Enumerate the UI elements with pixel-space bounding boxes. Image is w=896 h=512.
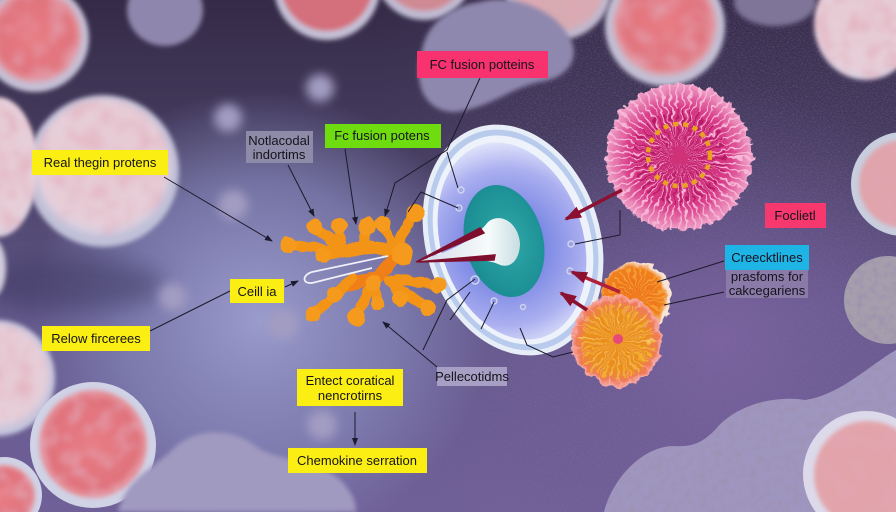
paperclip loop [304, 256, 388, 283]
teal core [452, 176, 556, 306]
cell: top right rose [605, 0, 725, 86]
disc inner [413, 123, 611, 359]
label: FC fusion potteins: FC fusion potteins [430, 57, 535, 72]
cell: bottom right pink [803, 411, 896, 512]
label: Entect coratical nencrotirns: nencrotirns [318, 388, 383, 403]
molecule: orange protein [280, 204, 446, 326]
label: prasfoms for cakcegariens: cakcegariens [729, 283, 806, 298]
membrane disc [394, 101, 632, 379]
cell: lower left rose [30, 382, 156, 508]
cell: right textured grey [844, 256, 896, 344]
leader lines [150, 78, 724, 445]
small blurred spheres [159, 74, 337, 440]
label: Pellecotidms: Pellecotidms [435, 369, 509, 384]
cell: top pale [504, 0, 612, 40]
label: Ceill ia [230, 279, 284, 303]
lilac blob: bottom [118, 432, 356, 512]
label: prasfoms for cakcegariens [726, 269, 808, 298]
cell: orange back [602, 262, 672, 332]
label: Creecktlines: Creecktlines [731, 250, 803, 265]
label: Ceill ia: Ceill ia [237, 284, 277, 299]
label: Entect coratical nencrotirns: Entect coratical [306, 373, 395, 388]
label: Chemokine serration: Chemokine serration [297, 453, 417, 468]
label: Notlacodal indortims: indortims [253, 147, 306, 162]
cell: top pink 2 [374, 0, 474, 20]
textured blobs: bottom right [604, 350, 896, 512]
label: FC fusion potteins [417, 51, 548, 78]
cell: orange front [572, 296, 662, 386]
label: Chemokine serration [288, 448, 427, 473]
label: Relow fircerees [42, 326, 150, 351]
label: Relow fircerees: Relow fircerees [51, 331, 141, 346]
cell: top pink 1 [274, 0, 380, 40]
cell: corner pale [814, 0, 896, 80]
label: Fc fusion potens: Fc fusion potens [334, 128, 430, 143]
label: Foclietl: Foclietl [774, 208, 816, 223]
dark red struts [416, 228, 495, 262]
yellow stamens ring [648, 124, 710, 186]
cell: spiky pink [606, 84, 752, 230]
label: Notlacodal indortims: Notlacodal [248, 133, 310, 148]
label: Foclietl [765, 203, 826, 228]
label: Creecktlines [725, 245, 809, 270]
cell: lower left pale [0, 320, 55, 436]
cell: top left pink [0, 0, 89, 92]
cell: right pink [851, 132, 896, 236]
cell: bottom left corner [0, 457, 42, 512]
label: Real thegin protens [32, 150, 168, 175]
cell: large pale left [27, 95, 179, 247]
red arrows [561, 190, 622, 310]
cell: left edge sliver [0, 240, 6, 296]
lilac blob: top right [734, 0, 816, 26]
label: Fc fusion potens [325, 124, 441, 148]
small receptor markers [456, 187, 574, 310]
white funnel [416, 218, 520, 266]
cell: left edge pale [0, 97, 38, 237]
label: prasfoms for cakcegariens: prasfoms for [731, 269, 804, 284]
label: Entect coratical nencrotirns [297, 369, 403, 406]
club ends [280, 204, 446, 326]
lilac blob: top centre [419, 0, 574, 112]
lilac blob: top [127, 0, 203, 46]
disc outer rim [394, 101, 632, 379]
label: Real thegin protens: Real thegin protens [44, 155, 157, 170]
label: Notlacodal indortims [246, 131, 313, 163]
